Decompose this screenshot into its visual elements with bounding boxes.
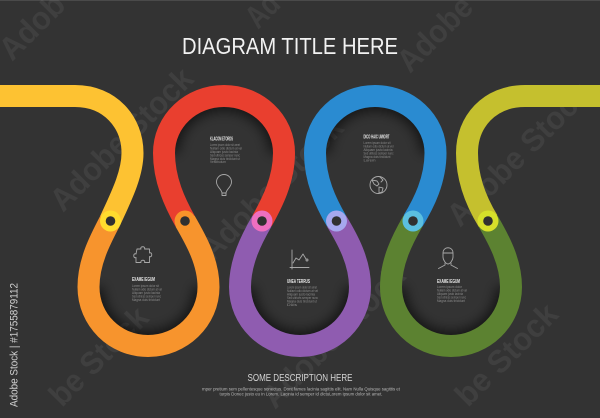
text block: orange loop: Lorem ipsum dolor sit bbox=[132, 284, 159, 288]
text block: blue loop: Magna duis tincidunt bbox=[364, 155, 390, 159]
text block: green loop: Sed ultrices semper nunc bbox=[437, 296, 466, 300]
text block: purple loop: Nullam odio dictum at vel bbox=[287, 289, 318, 293]
watermark: be Stock bbox=[41, 299, 155, 413]
text block: green loop: Aliquam justo lacinia bbox=[437, 292, 463, 296]
watermark: be Stock bbox=[447, 295, 565, 413]
ribbon: purple segment bbox=[240, 221, 360, 346]
text block: orange loop: EXAME IEGUM bbox=[132, 277, 155, 283]
text block: green loop: Nullam odio dictum at vel bbox=[437, 288, 467, 292]
text block: orange loop: Magna duis tincidunt bbox=[132, 298, 160, 302]
node: orange bbox=[174, 210, 196, 232]
text block: blue loop: Aliquam justo lacinia bbox=[364, 148, 392, 152]
text block: purple loop bbox=[287, 279, 318, 307]
top edge bbox=[0, 0, 600, 1]
ribbon: green segment bbox=[391, 221, 511, 346]
text block: green loop: EXAME IEGUM bbox=[437, 279, 460, 285]
text block: purple loop: UNEA TERRUS bbox=[287, 279, 310, 285]
text block: blue loop bbox=[364, 134, 394, 162]
watermark: Adobe Stock bbox=[42, 60, 200, 218]
text block: blue loop: Nullam odio dictum at vel bbox=[364, 144, 394, 148]
node: pink bbox=[252, 210, 272, 232]
description text: mper pretium sem pellentesque sonectus. Dont fames lacinia sagittis elit. Nam Nulla Quisque sagittis et bbox=[202, 386, 401, 392]
description text bbox=[202, 386, 401, 396]
node: yellow bbox=[100, 210, 121, 232]
ribbon: olive segment bbox=[467, 96, 600, 221]
icon: line chart bbox=[290, 250, 309, 269]
ribbon: red segment bbox=[164, 96, 284, 221]
icon: globe bbox=[370, 176, 387, 194]
text block: red loop: Vestibulum bbox=[210, 160, 226, 164]
description heading: SOME DESCRIPTION HERE bbox=[248, 373, 353, 384]
text block: blue loop: Lorem ipsum dolor sit bbox=[364, 141, 390, 145]
text block: green loop: Magna duis tincidunt bbox=[437, 299, 465, 303]
text block: orange loop: Sed ultrices semper nunc bbox=[132, 294, 161, 298]
node: lime bbox=[478, 210, 498, 232]
text block: orange loop: Aliquam justo lacinia bbox=[132, 291, 160, 295]
ribbon: yellow segment bbox=[0, 96, 132, 221]
icon: light bulb bbox=[216, 175, 232, 196]
text block: red loop: Magna duis tincidunt ut bbox=[210, 157, 240, 161]
node: lavender bbox=[326, 210, 347, 232]
text block: blue loop: Lorem bbox=[364, 158, 376, 162]
text block: purple loop: Magna duis tincidunt ut bbox=[287, 300, 317, 304]
node: cyan bbox=[402, 210, 424, 232]
ribbon: blue segment bbox=[315, 96, 436, 221]
text block: green loop: Lorem ipsum dolor bbox=[437, 285, 463, 289]
watermark: Adobe Stock bbox=[192, 109, 350, 267]
text block: purple loop: Sed ultrices semper nunc bbox=[287, 296, 318, 300]
title: DIAGRAM TITLE HERE bbox=[182, 33, 398, 59]
text block: red loop: Sed ultrices semper nunc bbox=[210, 154, 240, 158]
text block: purple loop: Duis bbox=[287, 303, 297, 307]
inner loop shadow bbox=[100, 107, 500, 335]
text block: orange loop: Nullam odio dictum at vel bbox=[132, 288, 162, 292]
text block: green loop bbox=[437, 279, 467, 303]
description text: turpis Donec justo eu in Lorem. Lacinia id semper id dictuLorem ipsum dolor sit amet. bbox=[220, 392, 382, 396]
text block: red loop: Aliquam justo lacinia bbox=[210, 150, 238, 154]
text block: blue loop: Sed ultrices semper nunc bbox=[364, 152, 394, 156]
text block: red loop: Nullam odio dictum at vel bbox=[210, 146, 242, 150]
text block: red loop: KLACOM ETORDS bbox=[210, 136, 233, 142]
watermark: Adobe Stock bbox=[439, 75, 597, 233]
text block: red loop: Lorem ipsum dolor sit amet bbox=[210, 143, 240, 147]
text block: purple loop: Lorem ipsum dolor sit amet bbox=[287, 286, 317, 290]
text block: orange loop bbox=[132, 277, 162, 302]
icon: person bbox=[438, 248, 458, 268]
side credit: Adobe Stock | #1755879112 bbox=[8, 283, 20, 407]
text block: purple loop: Aliquam justo lacinia bbox=[287, 292, 315, 296]
text block: blue loop: DICO HAIC UMIORT bbox=[364, 134, 390, 140]
watermark: Adobe Stock bbox=[254, 257, 412, 415]
ribbon: orange segment bbox=[88, 221, 208, 346]
text block: red loop bbox=[210, 136, 242, 164]
icon: puzzle bbox=[134, 247, 152, 262]
